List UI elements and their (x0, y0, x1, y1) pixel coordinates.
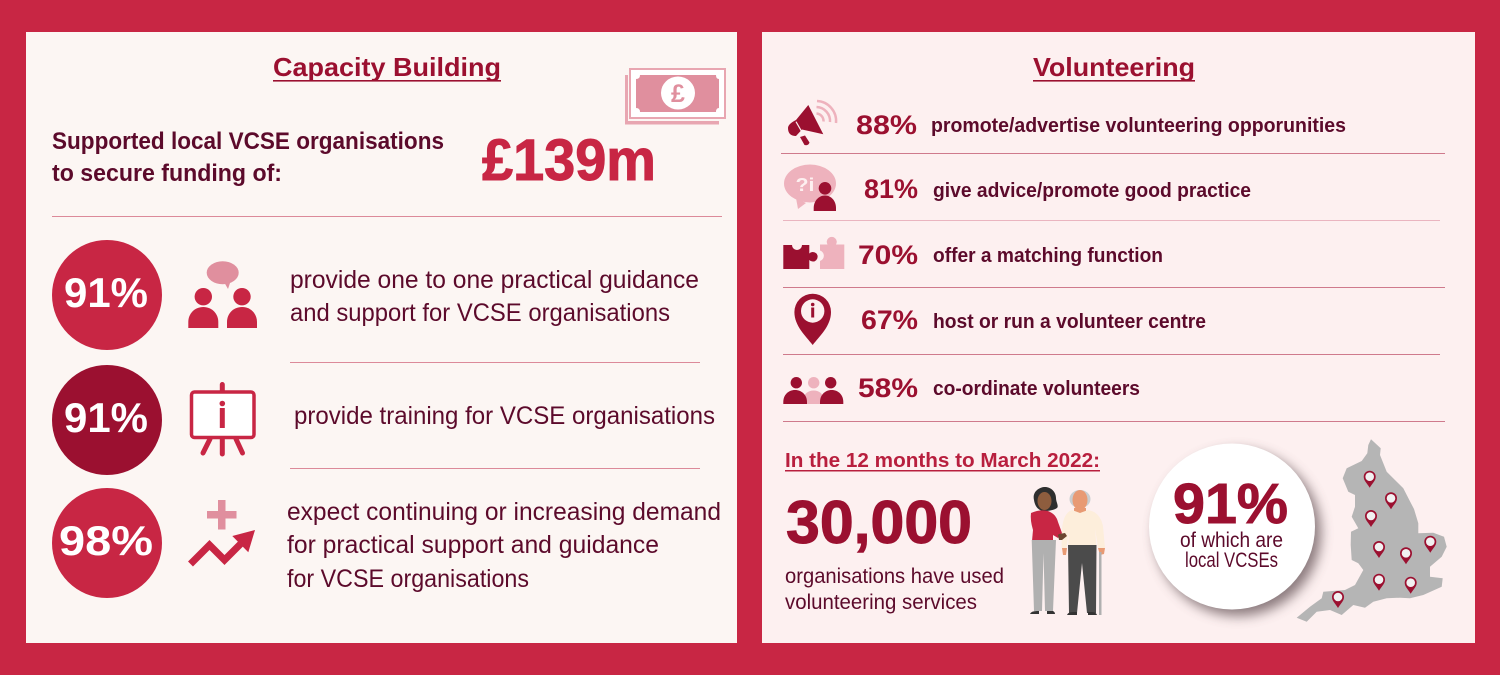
icon: presentation easel (192, 384, 254, 454)
stat: 91% guidance: 91% (64, 269, 148, 316)
icon: jigsaw pieces (783, 237, 844, 269)
illustration: two people (1030, 487, 1105, 615)
map: England with location pins (1297, 439, 1447, 622)
row: 58% coordinate: 58% (858, 373, 918, 403)
row: 67% centre (794, 294, 1206, 345)
row: 88% promote (788, 101, 1346, 145)
text: funding intro: Supported local VCSE organisations (52, 128, 444, 155)
stat: 91% training (52, 365, 162, 475)
row: 70% matching: offer a matching function (933, 245, 1163, 267)
callout: 91% local VCSEs: 91% (1173, 472, 1288, 536)
row: 58% coordinate (783, 373, 1140, 404)
icon: megaphone (788, 101, 836, 145)
icon: speech bubble and person (784, 164, 836, 211)
icon: plus and rising arrow (190, 500, 255, 564)
callout: 91% local VCSEs: local VCSEs (1185, 549, 1278, 572)
text: demand description: expect continuing or increasing demand (287, 498, 721, 526)
panel: volunteering (762, 32, 1475, 643)
text: guidance description: provide one to one practical guidance (290, 266, 699, 294)
stat: 98% demand (52, 488, 162, 598)
row: 67% centre: 67% (861, 305, 918, 335)
figure: £139m: £139m (482, 128, 656, 193)
row: 58% coordinate: co-ordinate volunteers (933, 378, 1140, 400)
row: 70% matching (783, 237, 1163, 270)
row: 88% promote: promote/advertise volunteering opporunities (931, 115, 1346, 137)
heading: capacity building: Capacity Building (273, 52, 501, 82)
icon: speech bubble and person: ?i (796, 175, 814, 195)
man (1058, 490, 1105, 615)
text: organisations description: volunteering services (785, 591, 977, 614)
text: organisations description: organisations have used (785, 565, 1004, 588)
woman (1030, 487, 1062, 614)
icon: information pin (794, 294, 831, 345)
panel: capacity building (26, 32, 737, 643)
row: 88% promote: 88% (856, 110, 917, 140)
text: training description: provide training for VCSE organisations (294, 402, 715, 430)
row: 81% advice: 81% (864, 174, 918, 204)
heading: volunteering: Volunteering (1033, 52, 1195, 82)
figure: 30,000: 30,000 (786, 489, 972, 556)
icon: three people (783, 377, 843, 404)
row: 70% matching: 70% (858, 240, 918, 270)
text: funding intro: to secure funding of: (52, 160, 282, 187)
text: guidance description: and support for VCSE organisations (290, 299, 670, 327)
icon: banknotes: £ (671, 80, 685, 108)
pins (1332, 471, 1436, 608)
row: 67% centre: host or run a volunteer centre (933, 311, 1206, 333)
row: 81% advice (784, 164, 1251, 211)
stat: 98% demand: 98% (59, 517, 153, 564)
subheading: time period: In the 12 months to March 2022: (785, 450, 1100, 472)
text: demand description: for practical support and guidance (287, 531, 659, 559)
text: demand description: for VCSE organisations (287, 565, 529, 593)
row: 81% advice: give advice/promote good practice (933, 180, 1251, 202)
stat: 91% training: 91% (64, 394, 148, 441)
stat: 91% guidance (52, 240, 162, 350)
icon: two people talking (188, 261, 257, 328)
callout: 91% local VCSEs: of which are (1180, 529, 1283, 552)
icon: banknotes (625, 69, 725, 124)
callout: 91% local VCSEs (1149, 444, 1321, 616)
